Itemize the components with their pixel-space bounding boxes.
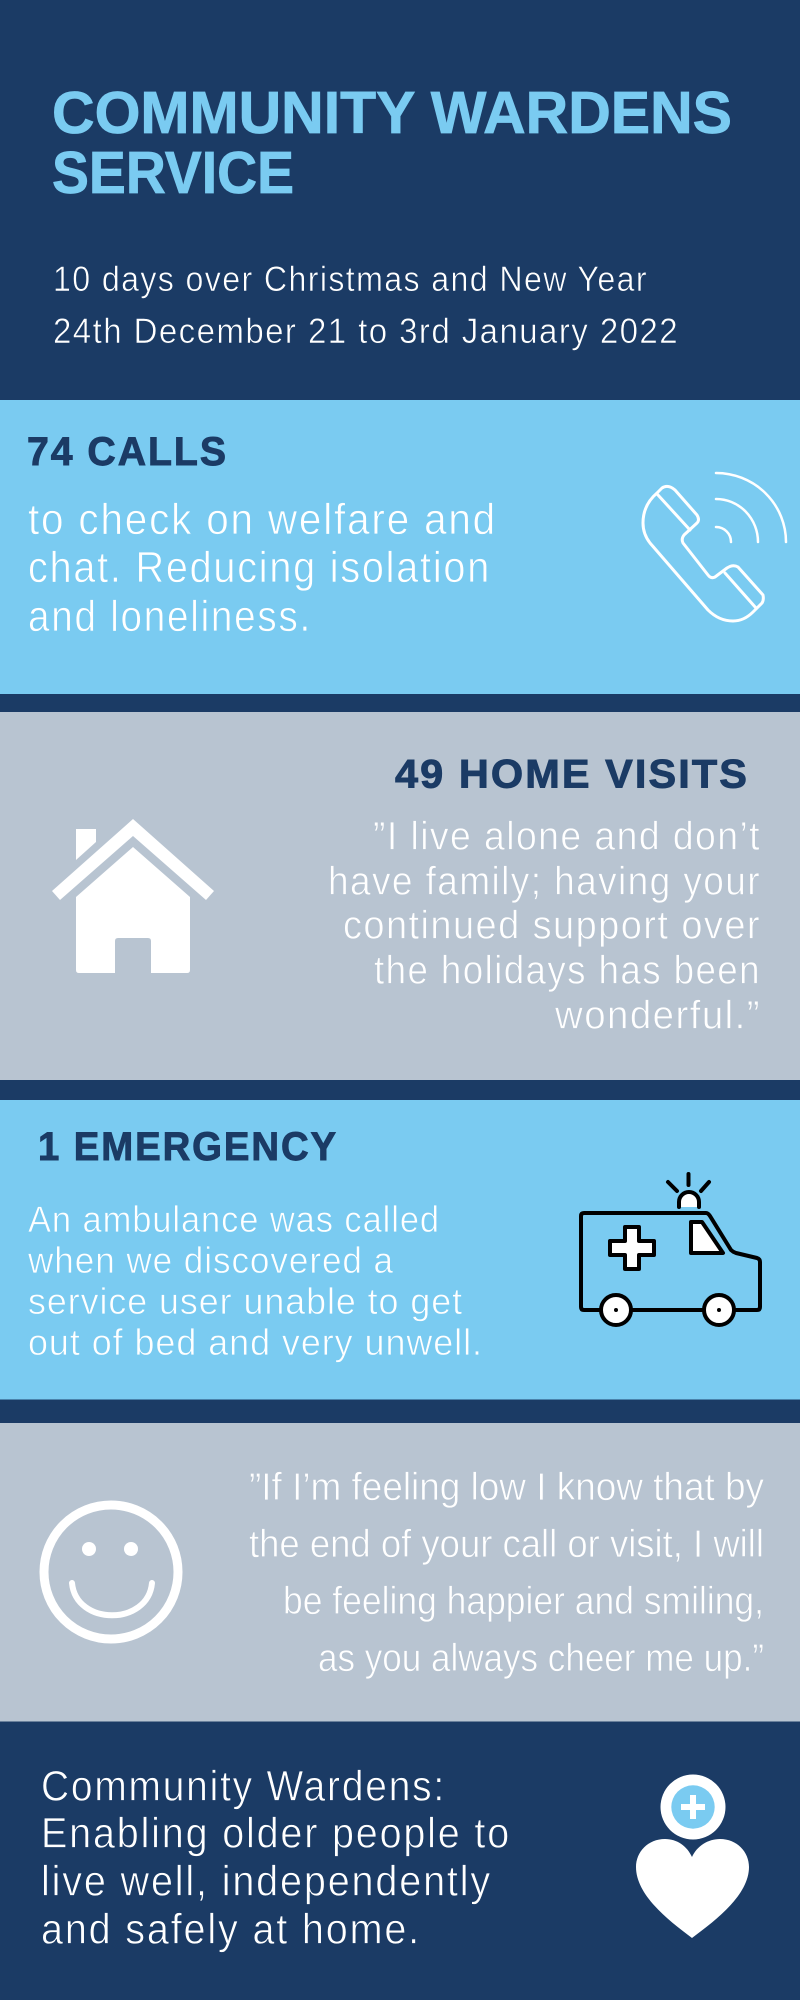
text: mission statement: and safely at home.	[41, 1906, 421, 1954]
text: emergency description: An ambulance was called	[28, 1198, 440, 1240]
text: smile quote: be feeling happier and smiling,	[283, 1580, 764, 1623]
text: mission statement: Community Wardens:	[41, 1762, 446, 1810]
text: emergency description: service user unable to get	[28, 1280, 463, 1322]
text: calls description	[28, 495, 497, 641]
panel: 1 emergency	[0, 1100, 800, 1400]
text: calls description: and loneliness.	[28, 592, 312, 641]
text: calls description: to check on welfare and	[28, 495, 497, 544]
text: emergency description: when we discovered a	[27, 1239, 394, 1281]
icon: house	[52, 819, 214, 973]
panel: 74 calls	[0, 400, 800, 694]
text: smile quote	[249, 1466, 764, 1680]
heading: 49 home visits: 49 HOME VISITS	[395, 752, 749, 796]
text: calls description: chat. Reducing isolation	[28, 543, 491, 592]
icon: telephone	[643, 473, 786, 621]
text: smile quote: ”If I’m feeling low I know that by	[249, 1466, 764, 1509]
title: COMMUNITY WARDENS	[52, 80, 732, 146]
heading: 1 emergency: 1 EMERGENCY	[38, 1125, 338, 1169]
subtitle dates: 10 days over Christmas and New Year	[53, 260, 648, 299]
text: smile quote: as you always cheer me up.”	[318, 1637, 764, 1680]
text: mission statement: live well, independently	[41, 1858, 492, 1906]
text: home visit quote: ”I live alone and don’t	[373, 814, 761, 858]
text: home visit quote: the holidays has been	[374, 948, 761, 992]
panel: footer	[0, 1722, 800, 2000]
heading: 74 calls: 74 CALLS	[27, 430, 228, 474]
header panel	[0, 0, 800, 400]
text: mission statement	[41, 1762, 511, 1954]
subtitle dates: 24th December 21 to 3rd January 2022	[53, 312, 679, 351]
title	[52, 80, 732, 206]
title: SERVICE	[52, 140, 294, 206]
icon: smiley face	[44, 1505, 178, 1639]
text: home visit quote	[328, 814, 761, 1038]
text: mission statement: Enabling older people to	[41, 1810, 511, 1858]
text: emergency description: out of bed and very unwell.	[28, 1321, 483, 1363]
subtitle dates	[53, 260, 679, 351]
icon: heart with medical plus	[636, 1774, 749, 1938]
text: home visit quote: continued support over	[343, 904, 761, 948]
text: home visit quote: wonderful.”	[554, 994, 761, 1038]
text: home visit quote: have family; having your	[328, 860, 761, 904]
panel: smile quote	[0, 1423, 800, 1722]
text: smile quote: the end of your call or visit, I will	[249, 1523, 764, 1566]
panel: 49 home visits	[0, 712, 800, 1080]
icon: ambulance	[581, 1174, 760, 1325]
text: emergency description	[27, 1198, 483, 1363]
